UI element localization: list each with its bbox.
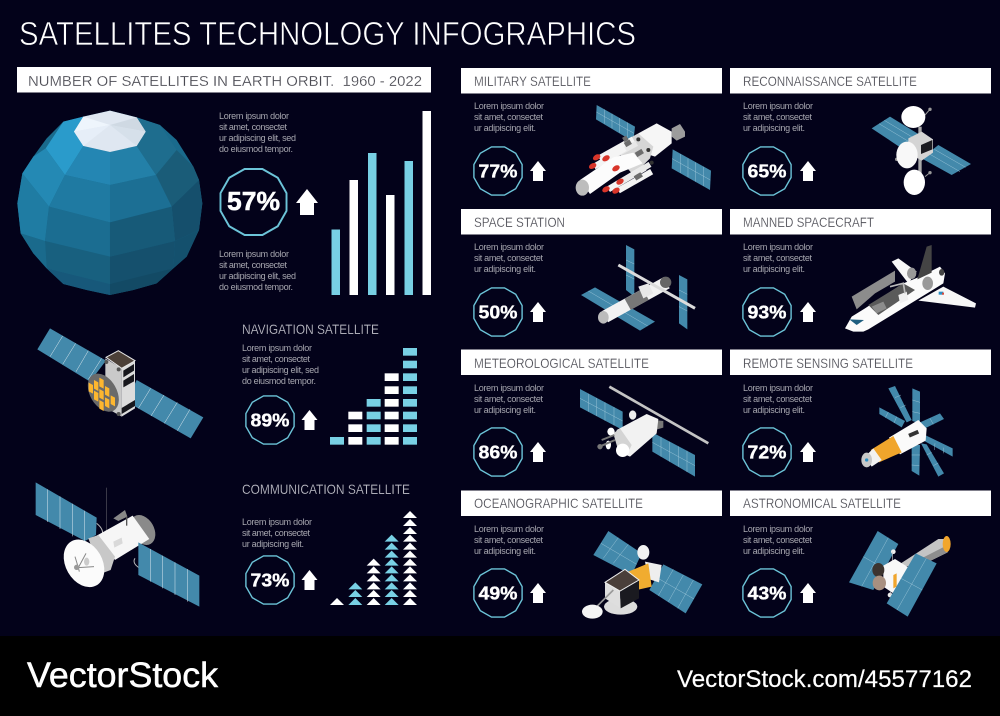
badge: 49%: 49% <box>478 584 518 604</box>
text block: ur adipiscing elit, sed <box>242 365 319 375</box>
text block: ur adipiscing elit. <box>474 546 536 556</box>
heading bar <box>461 209 722 234</box>
panel: space station <box>461 209 722 336</box>
text block <box>743 383 813 415</box>
arrow up <box>800 302 816 322</box>
text block: lower: do eiusmod tempor. <box>219 282 293 292</box>
text block <box>242 517 312 549</box>
badge: 43% <box>743 569 791 617</box>
title: SATELLITES TECHNOLOGY INFOGRAPHICS <box>19 16 636 53</box>
text block: lower: Lorem ipsum dolor <box>219 249 289 259</box>
arrow up <box>302 570 318 590</box>
text block: lower <box>219 249 296 292</box>
text block: ur adipiscing elit. <box>474 264 536 274</box>
bar chart <box>332 111 431 295</box>
heading bar: RECONNAISSANCE SATELLITE <box>743 73 917 89</box>
panel: military satellite <box>461 68 722 196</box>
text block <box>474 242 544 274</box>
heading bar: SPACE STATION <box>474 214 565 230</box>
arrow up <box>530 302 546 322</box>
heading bar: MILITARY SATELLITE <box>474 73 591 89</box>
text block: sit amet, consectet <box>242 354 310 364</box>
heading: NAVIGATION SATELLITE <box>242 321 379 337</box>
icon: space shuttle <box>845 245 976 332</box>
heading bar <box>730 490 991 516</box>
arrow up <box>800 583 816 603</box>
text block: Lorem ipsum dolor <box>474 383 544 393</box>
text block: upper: sit amet, consectet <box>219 122 287 132</box>
icon: space station <box>581 245 695 331</box>
arrow up <box>530 161 546 181</box>
text block: Lorem ipsum dolor <box>743 524 813 534</box>
text block: ur adipiscing elit. <box>474 405 536 415</box>
heading bar: NUMBER OF SATELLITES IN EARTH ORBIT. 1960 - 2022 <box>28 73 422 90</box>
badge: 93%: 93% <box>748 302 786 322</box>
badge: 89% <box>246 396 294 444</box>
icon: faceted globe <box>17 111 202 295</box>
text block: sit amet, consectet <box>743 253 812 263</box>
text block: sit amet, consectet <box>743 394 812 404</box>
icon: communication satellite <box>36 482 199 607</box>
panel: meteorological satellite <box>461 350 722 477</box>
badge: 73%: 73% <box>250 570 290 590</box>
arrow up <box>530 583 546 603</box>
text block: sit amet, consectet <box>242 528 310 538</box>
footer logo: VectorStock <box>27 656 219 695</box>
panel: communication satellite <box>36 481 417 607</box>
arrow up <box>302 410 318 430</box>
text block: sit amet, consectet <box>474 394 543 404</box>
text block: ur adipiscing elit. <box>743 264 805 274</box>
text block: do eiusmod tempor. <box>242 376 316 386</box>
text block: upper: do eiusmod tempor. <box>219 144 293 154</box>
text block: Lorem ipsum dolor <box>743 242 813 252</box>
heading bar <box>461 350 722 375</box>
text block: upper: ur adipiscing elit, sed <box>219 133 296 143</box>
arrow up <box>296 189 318 215</box>
heading bar <box>461 68 722 94</box>
icon: reconnaissance satellite <box>872 106 971 195</box>
text block: sit amet, consectet <box>474 112 543 122</box>
text block: Lorem ipsum dolor <box>242 343 312 353</box>
icon: military satellite <box>576 105 711 196</box>
heading: COMMUNICATION SATELLITE <box>242 481 410 497</box>
panel: astronomical satellite <box>730 490 991 617</box>
text block: sit amet, consectet <box>743 112 812 122</box>
text block: ur adipiscing elit. <box>743 405 805 415</box>
text block: sit amet, consectet <box>743 535 812 545</box>
badge: 43%: 43% <box>748 584 786 604</box>
footer image id: VectorStock.com/45577162 <box>677 666 972 693</box>
badge: 65%: 65% <box>748 162 786 182</box>
badge: 72%: 72% <box>748 442 786 462</box>
badge: 77%: 77% <box>478 162 518 182</box>
text block <box>743 101 813 133</box>
block chart <box>330 348 417 445</box>
badge: 73% <box>246 556 294 604</box>
heading bar: METEOROLOGICAL SATELLITE <box>474 355 649 371</box>
text block: Lorem ipsum dolor <box>474 242 544 252</box>
heading bar: OCEANOGRAPHIC SATELLITE <box>474 495 643 511</box>
footer band <box>0 636 1000 716</box>
text block: Lorem ipsum dolor <box>743 101 813 111</box>
text block: Lorem ipsum dolor <box>474 524 544 534</box>
arrow up <box>800 161 816 181</box>
badge: 72% <box>743 428 791 476</box>
panel: oceanographic satellite <box>461 490 722 619</box>
icon: meteorological satellite <box>580 387 708 477</box>
badge: 89%: 89% <box>250 410 290 430</box>
text block: Lorem ipsum dolor <box>474 101 544 111</box>
text block: sit amet, consectet <box>474 253 543 263</box>
triangle chart <box>330 511 417 605</box>
panel: number of satellites in earth orbit <box>17 67 431 295</box>
icon: astronomical satellite <box>849 531 951 617</box>
heading bar <box>17 67 431 92</box>
heading bar <box>730 350 991 375</box>
heading bar: REMOTE SENSING SATELLITE <box>743 355 913 371</box>
badge: 86%: 86% <box>478 442 518 462</box>
text block: sit amet, consectet <box>474 535 543 545</box>
heading bar: ASTRONOMICAL SATELLITE <box>743 495 901 511</box>
badge: 93% <box>743 288 791 336</box>
heading bar: MANNED SPACECRAFT <box>743 214 874 230</box>
badge: 77% <box>474 147 522 195</box>
heading bar <box>730 209 991 234</box>
text block: lower: sit amet, consectet <box>219 260 287 270</box>
badge: 50% <box>474 288 522 336</box>
arrow up <box>800 442 816 462</box>
badge: 49% <box>474 569 522 617</box>
panel: navigation satellite <box>37 321 417 445</box>
text block <box>474 383 544 415</box>
badge: 57%: 57% <box>227 186 280 216</box>
text block: Lorem ipsum dolor <box>743 383 813 393</box>
text block: ur adipiscing elit. <box>474 123 536 133</box>
text block <box>474 101 544 133</box>
badge: 57% <box>220 169 287 235</box>
text block <box>242 343 319 386</box>
text block: ur adipiscing elit. <box>743 546 805 556</box>
text block: upper: Lorem ipsum dolor <box>219 111 289 121</box>
text block: lower: ur adipiscing elit, sed <box>219 271 296 281</box>
text block: Lorem ipsum dolor <box>242 517 312 527</box>
heading bar <box>461 490 722 516</box>
panel: manned spacecraft <box>730 209 991 336</box>
text block: upper <box>219 111 296 154</box>
text block: ur adipiscing elit. <box>743 123 805 133</box>
icon: navigation satellite <box>37 328 203 438</box>
icon: remote sensing satellite <box>861 386 953 477</box>
panel: remote sensing satellite <box>730 350 991 477</box>
arrow up <box>530 442 546 462</box>
badge: 50%: 50% <box>478 302 518 322</box>
text block <box>743 242 813 274</box>
panel: reconnaissance satellite <box>730 68 991 195</box>
text block: ur adipiscing elit. <box>242 539 304 549</box>
heading bar <box>730 68 991 94</box>
badge: 86% <box>474 428 522 476</box>
text block <box>474 524 544 556</box>
icon: oceanographic satellite <box>582 531 702 619</box>
text block <box>743 524 813 556</box>
badge: 65% <box>743 147 791 195</box>
